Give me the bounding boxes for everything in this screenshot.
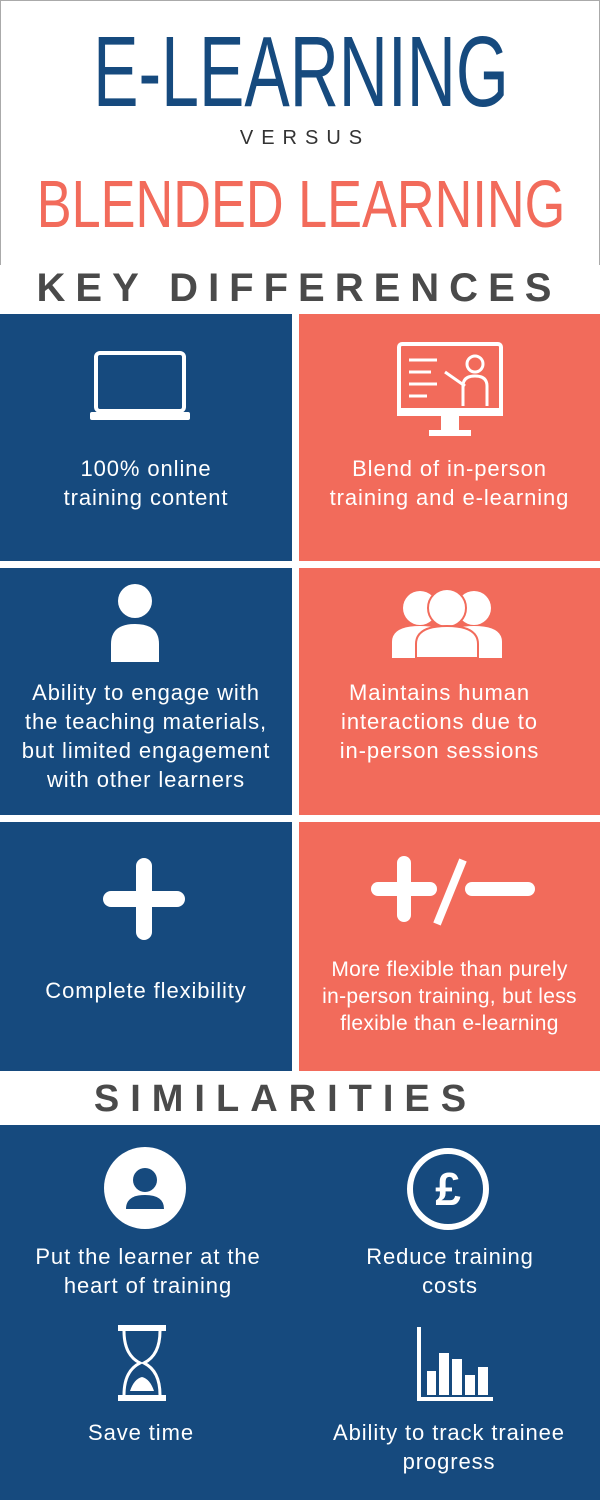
text: track bbox=[333, 1420, 565, 1474]
text: costs: costs bbox=[422, 1273, 478, 1298]
icon: person bbox=[111, 584, 159, 662]
title: e-learning: E-LEARNING bbox=[93, 16, 509, 128]
text: but limited engagement bbox=[22, 738, 270, 763]
heading: similarities: SIMILARITIES bbox=[94, 1078, 477, 1120]
panel: row 2 right bbox=[299, 568, 600, 815]
text: costs: Reduce training bbox=[366, 1244, 534, 1269]
text: interactions due to bbox=[341, 709, 538, 734]
icon: plus bbox=[103, 858, 185, 940]
text: Ability to engage with bbox=[32, 680, 260, 705]
text bbox=[340, 680, 539, 763]
text bbox=[330, 456, 569, 510]
versus: VERSUS bbox=[240, 127, 370, 149]
panel: row 3 right bbox=[299, 822, 600, 1071]
text: the teaching materials, bbox=[25, 709, 267, 734]
icon: pound: £ bbox=[435, 1163, 461, 1215]
text bbox=[22, 680, 270, 792]
text: costs bbox=[366, 1244, 534, 1298]
icon: bar chart bbox=[417, 1327, 493, 1401]
text: learner: heart of training bbox=[64, 1273, 232, 1298]
icon: laptop bbox=[90, 351, 190, 420]
text: track: progress bbox=[403, 1449, 495, 1474]
text bbox=[322, 958, 577, 1035]
icon: presentation screen bbox=[397, 342, 503, 436]
text: with other learners bbox=[47, 767, 245, 792]
icon: plus/minus bbox=[371, 856, 535, 926]
icon: group bbox=[392, 590, 502, 658]
panel: row 3 left bbox=[0, 822, 292, 1071]
text: in-person sessions bbox=[340, 738, 539, 763]
text: in-person training, but less bbox=[322, 985, 577, 1008]
heading: key differences: KEY DIFFERENCES bbox=[37, 266, 561, 310]
icon: hourglass bbox=[118, 1325, 166, 1401]
icon: pound bbox=[407, 1148, 489, 1230]
text: Complete flexibility bbox=[45, 978, 247, 1003]
text: track: Ability to track trainee bbox=[333, 1420, 565, 1445]
text: learner: Put the learner at the bbox=[35, 1244, 261, 1269]
icon: learner circle bbox=[104, 1147, 186, 1229]
title: blended learning: BLENDED LEARNING bbox=[37, 167, 565, 242]
panel: row 1 right bbox=[299, 314, 600, 561]
panel: similarities bbox=[0, 1125, 600, 1500]
text: 100% online bbox=[80, 456, 212, 481]
title box bbox=[0, 0, 600, 265]
text: More flexible than purely bbox=[331, 958, 568, 981]
text: training and e-learning bbox=[330, 485, 569, 510]
panel: row 2 left bbox=[0, 568, 292, 815]
text: Maintains human bbox=[349, 680, 530, 705]
text bbox=[64, 456, 228, 510]
text: time: Save time bbox=[88, 1420, 194, 1445]
text: training content bbox=[64, 485, 228, 510]
text: learner bbox=[35, 1244, 261, 1298]
text: flexible than e-learning bbox=[340, 1012, 559, 1035]
panel: row 1 left bbox=[0, 314, 292, 561]
text: Blend of in-person bbox=[352, 456, 547, 481]
